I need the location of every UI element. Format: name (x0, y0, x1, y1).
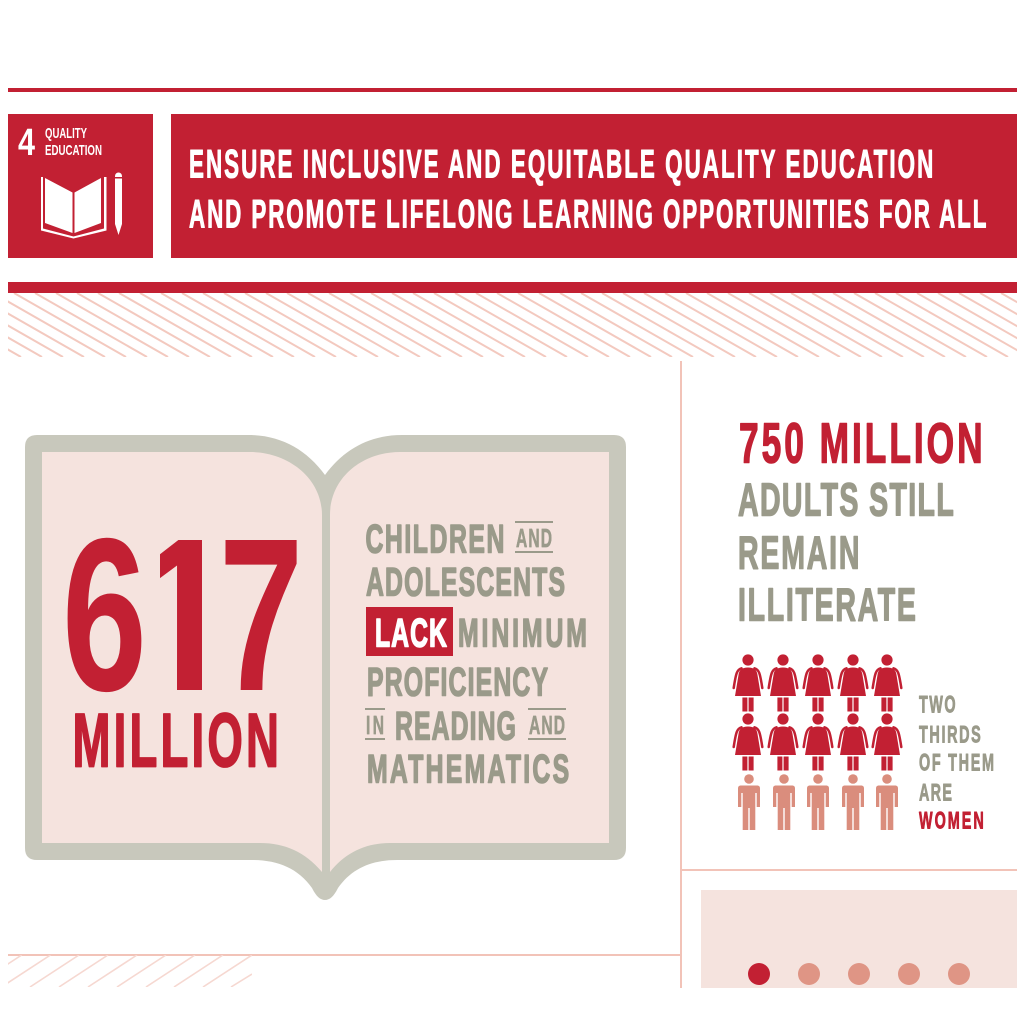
statistic: 750 million: REMAIN (738, 528, 860, 579)
highlight: lack: LACK (375, 612, 447, 656)
statistic: 617 million: 1 (134, 493, 236, 737)
statistic: 617 million (68, 538, 297, 768)
book text: ADOLESCENTS (366, 561, 565, 605)
statistic: 617 million: MILLION (72, 699, 279, 783)
title text: AND PROMOTE LIFELONG LEARNING OPPORTUNITIES FOR ALL (189, 192, 986, 236)
goal name: QUALITY (45, 125, 87, 142)
book text: CHILDREN (366, 518, 504, 562)
title banner (171, 114, 1017, 258)
book text: PROFICIENCY (367, 661, 548, 705)
caption: two thirds are women: OF THEM (919, 750, 994, 777)
goal name: EDUCATION (45, 142, 102, 159)
statistic: 750 million: 750 MILLION (739, 412, 983, 476)
caption: two thirds are women (919, 692, 994, 835)
book text: READING (395, 705, 516, 749)
caption: two thirds are women: THIRDS (919, 722, 981, 749)
statistic: 617 million: 6 (62, 493, 147, 736)
dot indicators (748, 963, 970, 985)
statistic: 750 million (738, 412, 983, 631)
icon: SDG 4 quality education tile (8, 114, 153, 258)
small word: and: AND (516, 524, 552, 553)
men row (738, 774, 898, 830)
book cover (25, 435, 626, 900)
book left page (42, 452, 322, 872)
book text: MATHEMATICS (367, 748, 569, 792)
women row 1 (734, 654, 901, 712)
small word: and: AND (529, 711, 565, 740)
goal number: 4 (18, 122, 35, 164)
book right page (330, 452, 609, 872)
panel: bottom right (701, 890, 1017, 988)
icon: pencil (115, 173, 122, 235)
caption: two thirds are women: WOMEN (919, 808, 984, 835)
icon: open book (41, 177, 106, 238)
small word: in: IN (366, 711, 384, 740)
book text (365, 518, 587, 792)
statistic: 617 million: 7 (219, 493, 303, 736)
pictogram: women and men (734, 654, 901, 830)
goal name (45, 125, 102, 159)
statistic: 750 million: ILLITERATE (738, 580, 916, 631)
book panel (25, 435, 626, 900)
caption: two thirds are women: TWO (919, 692, 956, 719)
title text (189, 142, 986, 236)
statistic: 750 million: ADULTS STILL (738, 475, 954, 526)
book text: MINIMUM (458, 612, 587, 656)
women row 2 (734, 713, 901, 770)
caption: two thirds are women: ARE (919, 780, 952, 807)
title text: ENSURE INCLUSIVE AND EQUITABLE QUALITY EDUCATION (189, 142, 933, 186)
top rule (8, 88, 1017, 92)
